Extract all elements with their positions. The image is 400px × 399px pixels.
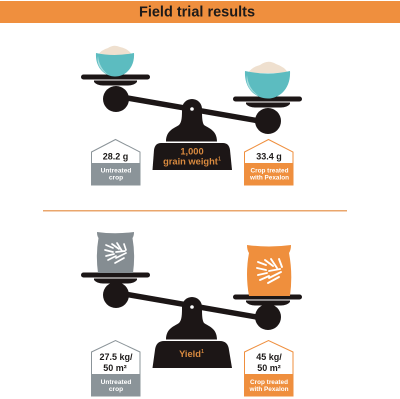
left pan [81,272,150,308]
right value box: Crop treated [250,379,288,386]
left bowl with rice [96,46,134,76]
left value box: 28.2 g [103,152,128,162]
right value box: 45 kg/ [256,352,282,362]
header banner [0,1,400,23]
right value box: Crop treated [250,168,289,174]
right bowl with rice [245,62,290,98]
left value box: Untreated [101,168,131,174]
right value box [244,340,294,396]
scale: yield [81,232,302,368]
scale: 1,000 grain weight [81,46,302,170]
grey sack [97,232,134,273]
left value box: Untreated [101,379,131,386]
base [152,341,232,368]
stand [166,297,217,340]
title: Field trial results [139,4,255,20]
right pan [233,294,302,330]
beam [116,292,268,319]
left value box: crop [109,174,123,182]
left value box: 50 m² [103,363,127,373]
right value box: with Pexalon [248,386,289,393]
base label: Yield [179,349,201,359]
base label: 1 [201,349,204,355]
left value box: 27.5 kg/ [99,352,133,362]
stand [166,99,217,142]
base label: 1,000 [180,146,204,156]
right value box: with Pexalon [249,174,289,182]
base label: grain weight [163,156,218,166]
right value box: 50 m² [257,363,281,373]
base [152,143,232,170]
beam [116,96,268,122]
orange sack [247,245,291,296]
right value box [244,140,294,186]
base label [163,146,221,166]
left value box [91,340,140,396]
left pan [81,74,150,112]
right value box: 33.4 g [256,152,282,162]
left value box: crop [109,386,123,393]
left value box [91,140,140,186]
base label: 1 [218,156,221,162]
right pan [233,96,302,134]
